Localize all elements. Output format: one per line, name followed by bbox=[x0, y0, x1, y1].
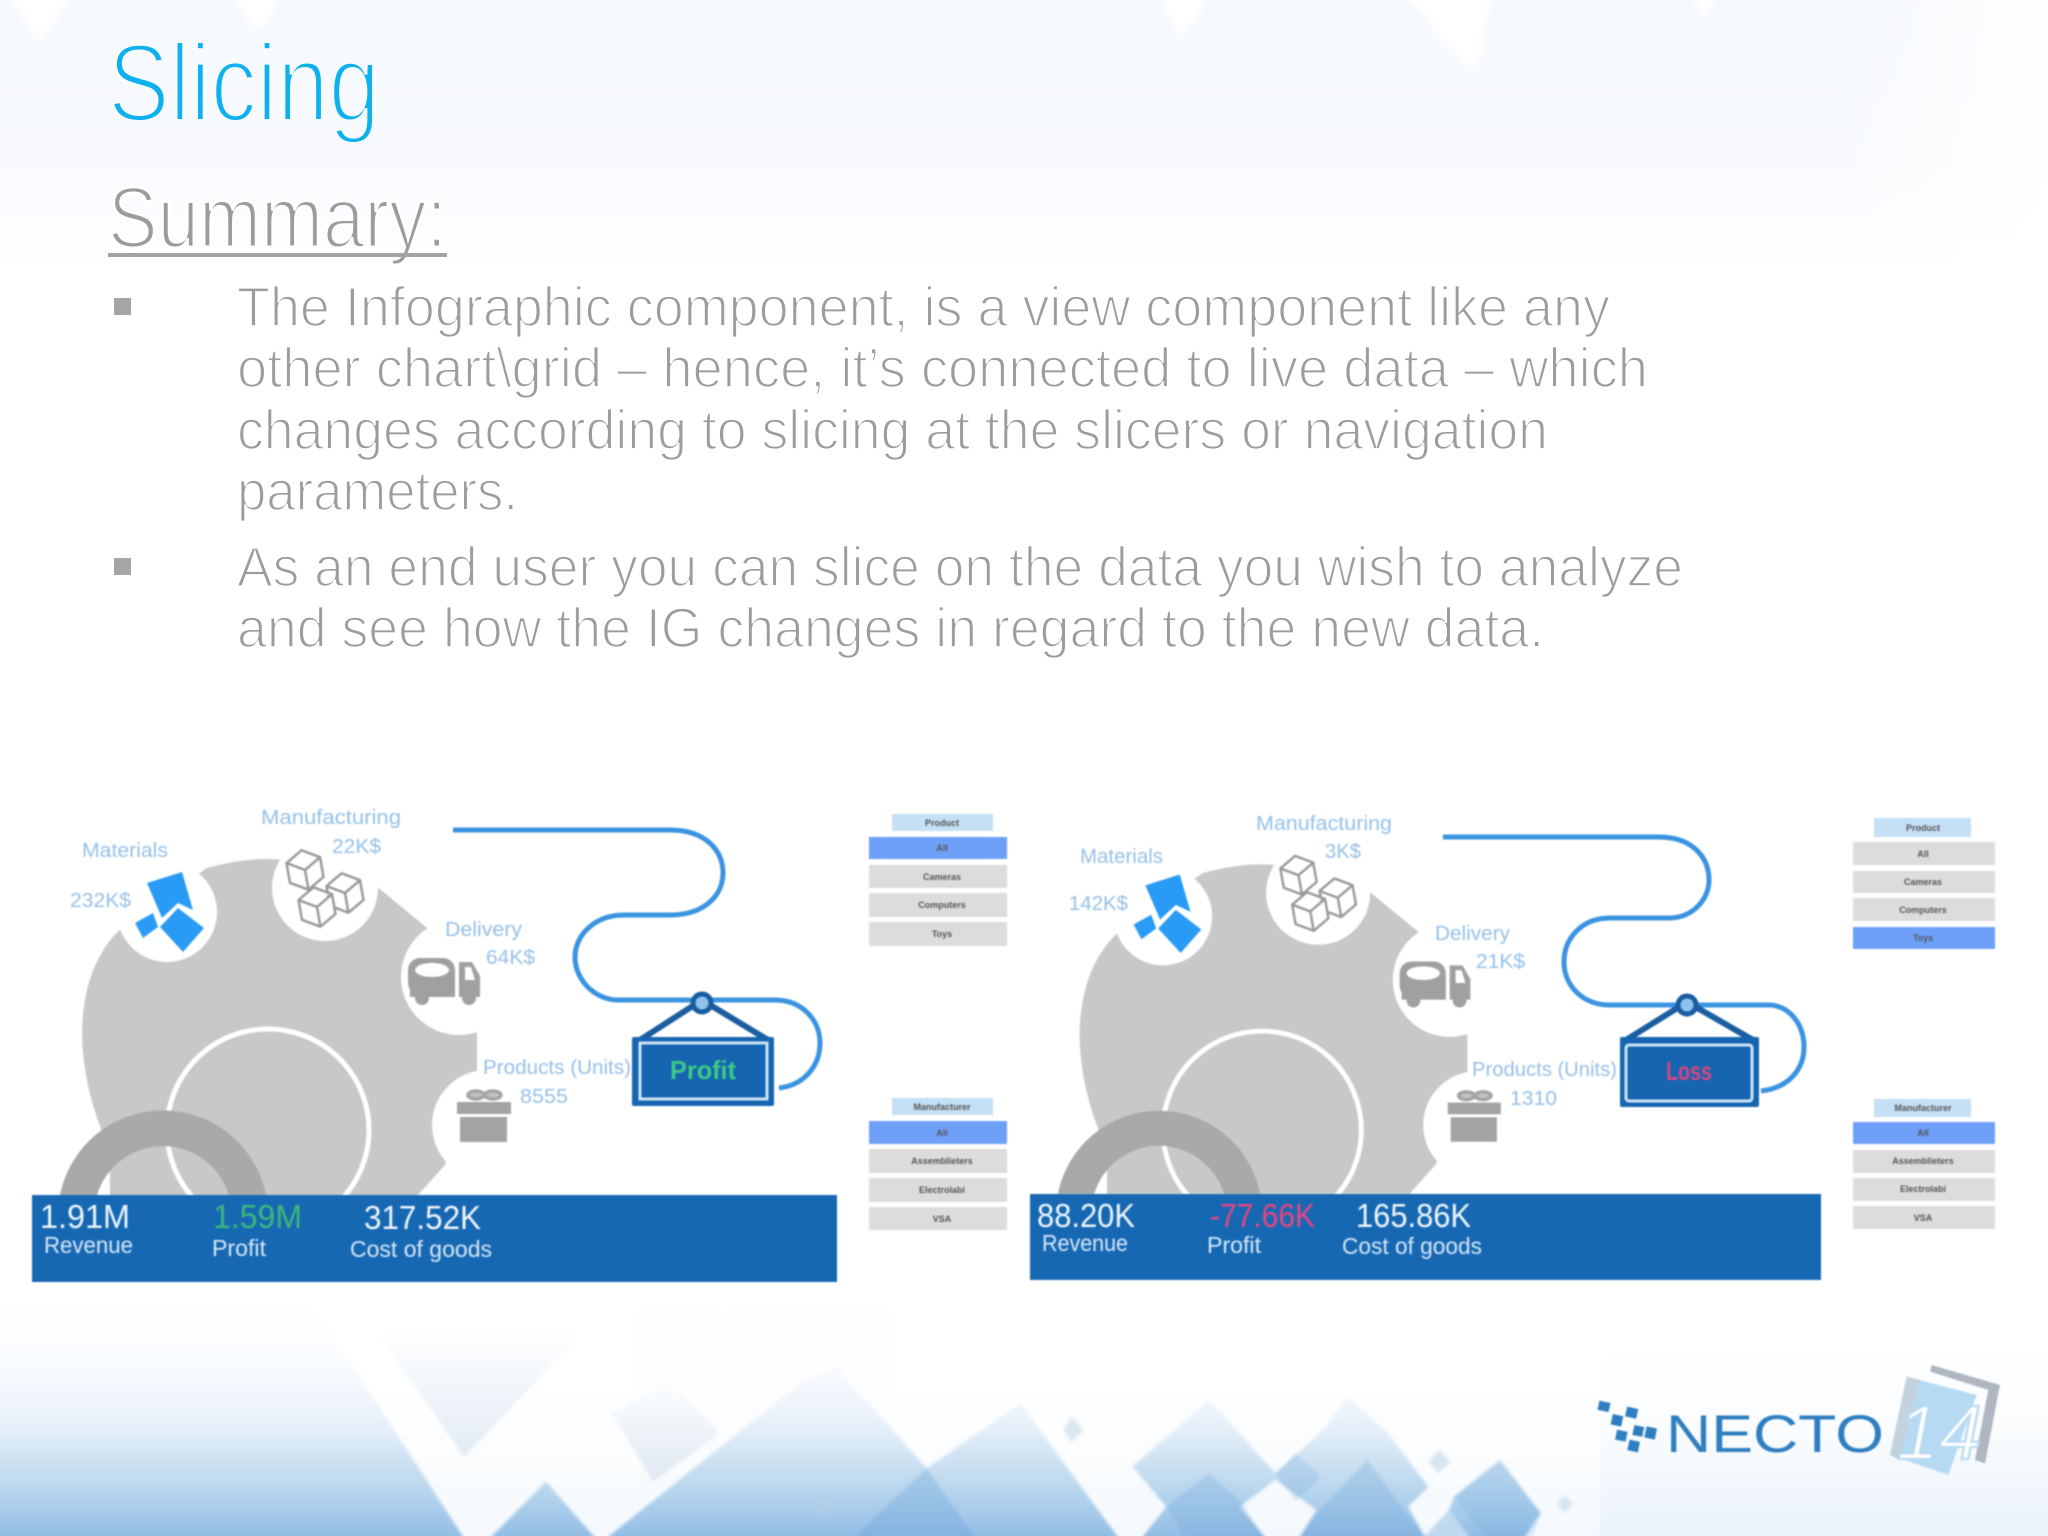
bullet list bbox=[114, 275, 1683, 659]
slicer: manufacturer: All bbox=[1917, 1128, 1929, 1138]
kpi: profit bbox=[1207, 1197, 1315, 1258]
gear bbox=[60, 835, 542, 1231]
label: materials: 142K$ bbox=[1069, 893, 1128, 915]
panel: loss infographic bbox=[1030, 813, 1995, 1280]
title: Slicing bbox=[108, 22, 380, 145]
slicer: manufacturer: Manufacturer bbox=[913, 1102, 971, 1112]
kpi bar bbox=[32, 1195, 837, 1282]
slicer: product bbox=[869, 814, 1007, 946]
panel: profit infographic bbox=[32, 807, 1007, 1282]
label: materials bbox=[70, 840, 168, 912]
kpi: cost of goods: 317.52K bbox=[364, 1199, 481, 1236]
slicer: product: Toys bbox=[1913, 933, 1933, 943]
kpi bar bbox=[1030, 1194, 1821, 1280]
kpi: profit: 1.59M bbox=[213, 1198, 302, 1235]
icon: materials bbox=[135, 872, 204, 952]
kpi: cost of goods bbox=[1342, 1197, 1482, 1259]
label: delivery: Delivery bbox=[445, 919, 522, 941]
slicer: product: Computers bbox=[918, 900, 966, 910]
logo: necto 14 bbox=[1597, 1365, 2000, 1476]
label: products: Products (Units) bbox=[483, 1057, 631, 1079]
bullet 1: changes according to slicing at the slicers or navigation bbox=[237, 398, 1548, 461]
slicer: manufacturer bbox=[1853, 1099, 1995, 1229]
kpi: cost of goods bbox=[350, 1199, 492, 1262]
label: products bbox=[483, 1057, 631, 1108]
heading: summary: Summary: bbox=[108, 170, 447, 266]
slicer: product bbox=[1853, 818, 1995, 949]
label: delivery: 21K$ bbox=[1476, 951, 1525, 973]
icon: manufacturing cubes bbox=[285, 847, 365, 930]
icon: materials bbox=[1134, 875, 1201, 953]
slicer: manufacturer: VSA bbox=[1914, 1213, 1933, 1223]
slicer: product: Cameras bbox=[923, 872, 961, 882]
slicer: manufacturer: Electrolabi bbox=[919, 1185, 965, 1195]
label: manufacturing: 22K$ bbox=[332, 836, 381, 858]
slicer: product: Computers bbox=[1899, 905, 1947, 915]
icon: manufacturing cubes bbox=[1279, 853, 1358, 934]
label: manufacturing bbox=[261, 807, 401, 858]
kpi: revenue: Revenue bbox=[1042, 1230, 1128, 1256]
connector wire bbox=[453, 830, 820, 1088]
label: manufacturing: 3K$ bbox=[1325, 841, 1361, 863]
label: products: 8555 bbox=[520, 1086, 568, 1108]
bullet 2 bbox=[114, 535, 1683, 659]
bullet 1 bbox=[114, 275, 1648, 522]
kpi: cost of goods: Cost of goods bbox=[350, 1236, 492, 1262]
label: manufacturing: Manufacturing bbox=[261, 807, 401, 829]
slicer: manufacturer: Assemblieters bbox=[911, 1156, 973, 1166]
label: materials bbox=[1069, 846, 1163, 915]
icon: gift bbox=[457, 1091, 511, 1142]
gear bbox=[1058, 841, 1531, 1229]
kpi: cost of goods: Cost of goods bbox=[1342, 1233, 1482, 1259]
icon: delivery truck bbox=[1400, 961, 1470, 1008]
kpi: profit bbox=[212, 1198, 302, 1261]
slicer: manufacturer: VSA bbox=[933, 1214, 952, 1224]
bullet 2: As an end user you can slice on the data you wish to analyze bbox=[237, 535, 1683, 598]
kpi: revenue: 88.20K bbox=[1037, 1197, 1135, 1234]
slicer: manufacturer: Manufacturer bbox=[1894, 1103, 1952, 1113]
label: manufacturing bbox=[1256, 813, 1392, 863]
sign: loss: Loss bbox=[1666, 1056, 1712, 1086]
label: delivery bbox=[445, 919, 535, 969]
kpi: profit: -77.66K bbox=[1210, 1197, 1315, 1234]
logo: 14 tile: 14 bbox=[1897, 1391, 1982, 1476]
slicer: manufacturer: All bbox=[936, 1128, 948, 1138]
kpi: revenue bbox=[1037, 1197, 1135, 1256]
kpi: profit: Profit bbox=[212, 1235, 267, 1261]
logo mark: squares bbox=[1597, 1401, 1657, 1452]
bullet 1: parameters. bbox=[237, 459, 518, 522]
kpi: revenue: 1.91M bbox=[40, 1198, 130, 1235]
label: materials: Materials bbox=[1080, 846, 1163, 868]
bullet 1: other chart\grid – hence, it’s connected to live data – which bbox=[237, 336, 1648, 399]
slicer: product: Toys bbox=[932, 929, 952, 939]
label: delivery: 64K$ bbox=[486, 947, 535, 969]
connector wire bbox=[1443, 837, 1804, 1091]
label: delivery: Delivery bbox=[1435, 923, 1510, 945]
label: delivery bbox=[1435, 923, 1525, 973]
bullet 1: The Infographic component, is a view component like any bbox=[237, 275, 1610, 338]
label: materials: 232K$ bbox=[70, 890, 131, 912]
slicer: product: Product bbox=[925, 818, 959, 828]
kpi: revenue bbox=[40, 1198, 133, 1258]
sign: profit bbox=[632, 994, 774, 1106]
slicer: manufacturer: Assemblieters bbox=[1892, 1156, 1954, 1166]
slicer: product: All bbox=[1917, 849, 1929, 859]
label: manufacturing: Manufacturing bbox=[1256, 813, 1392, 835]
icon: gift bbox=[1448, 1092, 1501, 1142]
logo: 14 tile bbox=[1890, 1365, 2000, 1476]
bullet 2: and see how the IG changes in regard to the new data. bbox=[237, 596, 1544, 659]
slicer: manufacturer bbox=[869, 1098, 1007, 1230]
logo wordmark: NECTO bbox=[1666, 1405, 1884, 1464]
slicer: product: Cameras bbox=[1904, 877, 1942, 887]
icon: delivery truck bbox=[408, 958, 480, 1005]
kpi: revenue: Revenue bbox=[44, 1232, 133, 1258]
label: materials: Materials bbox=[82, 840, 168, 862]
kpi: profit: Profit bbox=[1207, 1232, 1262, 1258]
label: products: Products (Units) bbox=[1472, 1059, 1617, 1081]
label: products bbox=[1472, 1059, 1617, 1110]
sign: loss bbox=[1620, 996, 1759, 1107]
kpi: cost of goods: 165.86K bbox=[1356, 1197, 1471, 1234]
sign: profit: Profit bbox=[670, 1055, 736, 1085]
slicer: product: All bbox=[936, 843, 948, 853]
slicer: product: Product bbox=[1906, 823, 1940, 833]
label: products: 1310 bbox=[1510, 1088, 1557, 1110]
slicer: manufacturer: Electrolabi bbox=[1900, 1184, 1946, 1194]
